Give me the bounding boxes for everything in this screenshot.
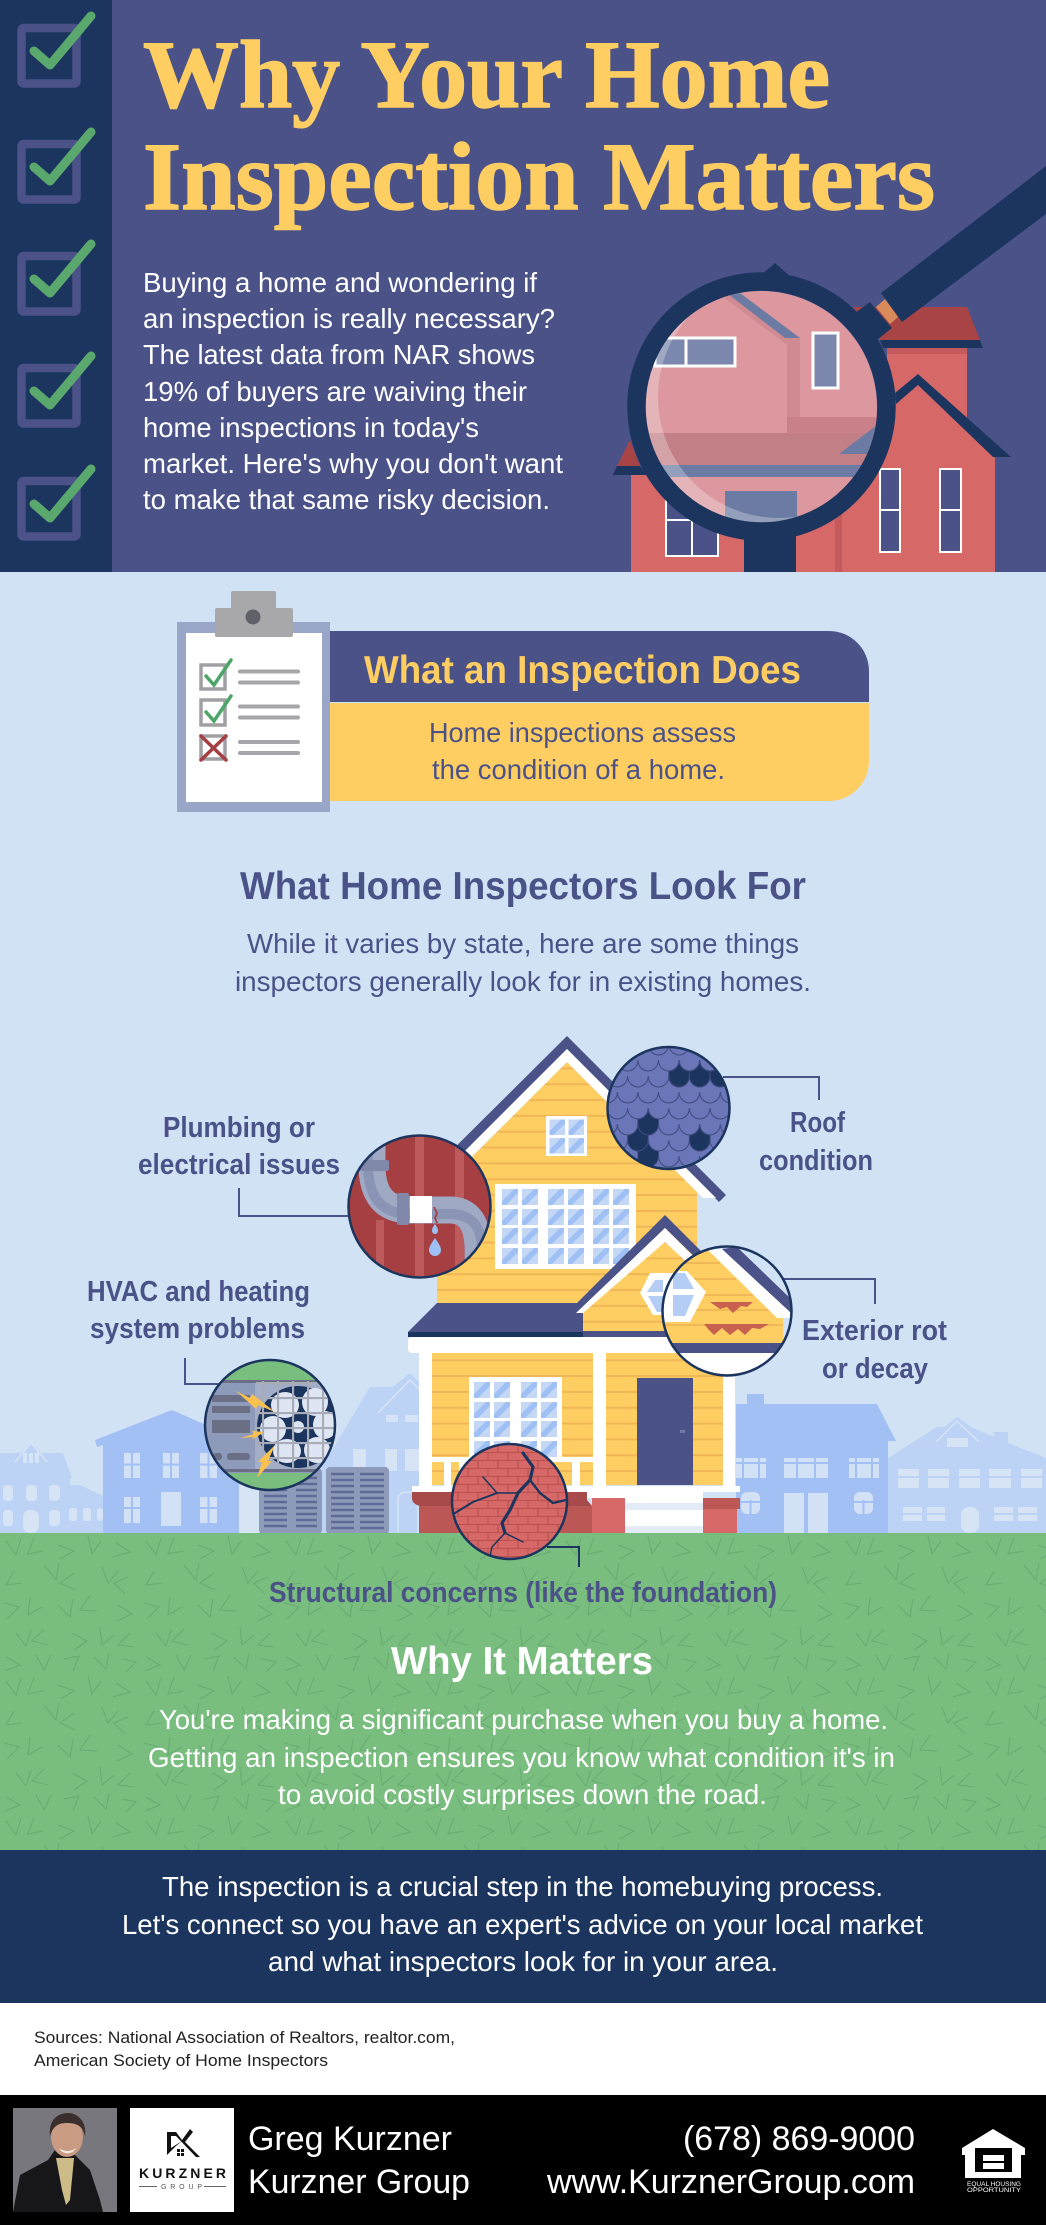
intro text: market. Here's why you don't want (143, 448, 563, 479)
label: hvac and heating system problems: system problems (90, 1313, 305, 1345)
panel: call to action: The inspection is a crucial step in the homebuying process. (162, 1871, 883, 1902)
company logo (130, 2108, 234, 2212)
intro text: home inspections in today's (143, 412, 479, 443)
label: plumbing or electrical issues: electrical issues (138, 1149, 340, 1181)
panel: grass (0, 1533, 1046, 1850)
agent photo (13, 2108, 117, 2212)
text: why it matters: to avoid costly surprises down the road. (278, 1779, 767, 1810)
heading: why it matters: Why It Matters (391, 1640, 653, 1683)
icon: equal housing opportunity (962, 2129, 1025, 2194)
contact details: www.KurznerGroup.com (546, 2163, 915, 2201)
company logo: KURZNER (139, 2165, 226, 2181)
contact details (546, 2120, 915, 2201)
lower storey (419, 1350, 735, 1486)
label: plumbing or electrical issues (138, 1112, 340, 1181)
company logo: GROUP (161, 2184, 202, 2191)
panel: call to action (0, 1850, 1046, 2003)
icon: equal housing opportunity: OPPORTUNITY (967, 2187, 1022, 2194)
intro text: to make that same risky decision. (143, 484, 550, 515)
label: roof condition: condition (759, 1145, 873, 1177)
panel: header (0, 0, 1046, 572)
banner: what an inspection does: Home inspections assess (429, 717, 736, 748)
panel: light blue inspection section (0, 572, 1046, 1533)
text: why it matters: You're making a significant purchase when you buy a home. (159, 1704, 888, 1735)
panel: sources: American Society of Home Inspectors (34, 2052, 328, 2070)
label: exterior rot or decay: Exterior rot (802, 1315, 947, 1347)
title (143, 21, 935, 230)
banner: what an inspection does (330, 631, 869, 801)
label: roof condition: Roof (790, 1107, 845, 1139)
yellow house (408, 1036, 780, 1533)
subheading text (235, 928, 811, 997)
subheading text: While it varies by state, here are some things (247, 928, 799, 959)
icon: equal housing opportunity: EQUAL HOUSING (967, 2181, 1021, 2188)
callout circle: exterior rot (660, 1245, 875, 1380)
label: exterior rot or decay: or decay (822, 1353, 928, 1385)
intro text: The latest data from NAR shows (143, 339, 535, 370)
title: Why Your Home (143, 21, 830, 128)
panel: sources: Sources: National Association of Realtors, realtor.com, (34, 2029, 455, 2047)
callout circle: hvac (185, 1355, 340, 1495)
intro text: 19% of buyers are waiving their (143, 376, 527, 407)
callout circle: roof condition (600, 1040, 819, 1175)
neighbourhood skyline (0, 1373, 1046, 1533)
agent name (248, 2120, 470, 2201)
foundation and steps (412, 1486, 740, 1533)
callout circle: foundation (450, 1442, 579, 1567)
panel: footer (0, 2095, 1046, 2225)
intro text (143, 267, 563, 515)
subheading text: inspectors generally look for in existing homes. (235, 966, 811, 997)
icon: ac units (259, 1467, 389, 1534)
agent name: Greg Kurzner (248, 2120, 452, 2158)
label: hvac and heating system problems (87, 1276, 310, 1345)
contact details: (678) 869-9000 (683, 2120, 915, 2158)
heading: what home inspectors look for: What Home Inspectors Look For (240, 865, 806, 908)
agent name: Kurzner Group (248, 2163, 470, 2201)
intro text: an inspection is really necessary? (143, 303, 555, 334)
small upper window (546, 1116, 587, 1156)
callout circle: plumbing (239, 1130, 495, 1285)
intro text: Buying a home and wondering if (143, 267, 537, 298)
panel: call to action: Let's connect so you have an expert's advice on your local market (122, 1909, 923, 1940)
magnifying glass (636, 166, 1046, 572)
label: structural concerns: Structural concerns (like the foundation) (269, 1577, 777, 1609)
label: exterior rot or decay (802, 1315, 947, 1385)
banner: what an inspection does: What an Inspection Does (364, 649, 801, 692)
red house illustration (613, 307, 1011, 572)
icon: clipboard (177, 591, 330, 812)
label: plumbing or electrical issues: Plumbing or (163, 1112, 315, 1144)
label: hvac and heating system problems: HVAC and heating (87, 1276, 310, 1308)
porch roof (408, 1303, 583, 1332)
label: roof condition (759, 1107, 873, 1177)
panel: sources (0, 2003, 1046, 2095)
text: why it matters: Getting an inspection ensures you know what condition it's in (148, 1742, 895, 1773)
large upper window (495, 1184, 636, 1269)
panel: call to action: and what inspectors look for in your area. (268, 1946, 778, 1977)
sidebar with checkboxes (0, 0, 112, 572)
title: Inspection Matters (143, 123, 935, 230)
cross gable (570, 1215, 780, 1337)
banner: what an inspection does: the condition of a home. (432, 754, 725, 785)
text: why it matters (148, 1704, 895, 1810)
